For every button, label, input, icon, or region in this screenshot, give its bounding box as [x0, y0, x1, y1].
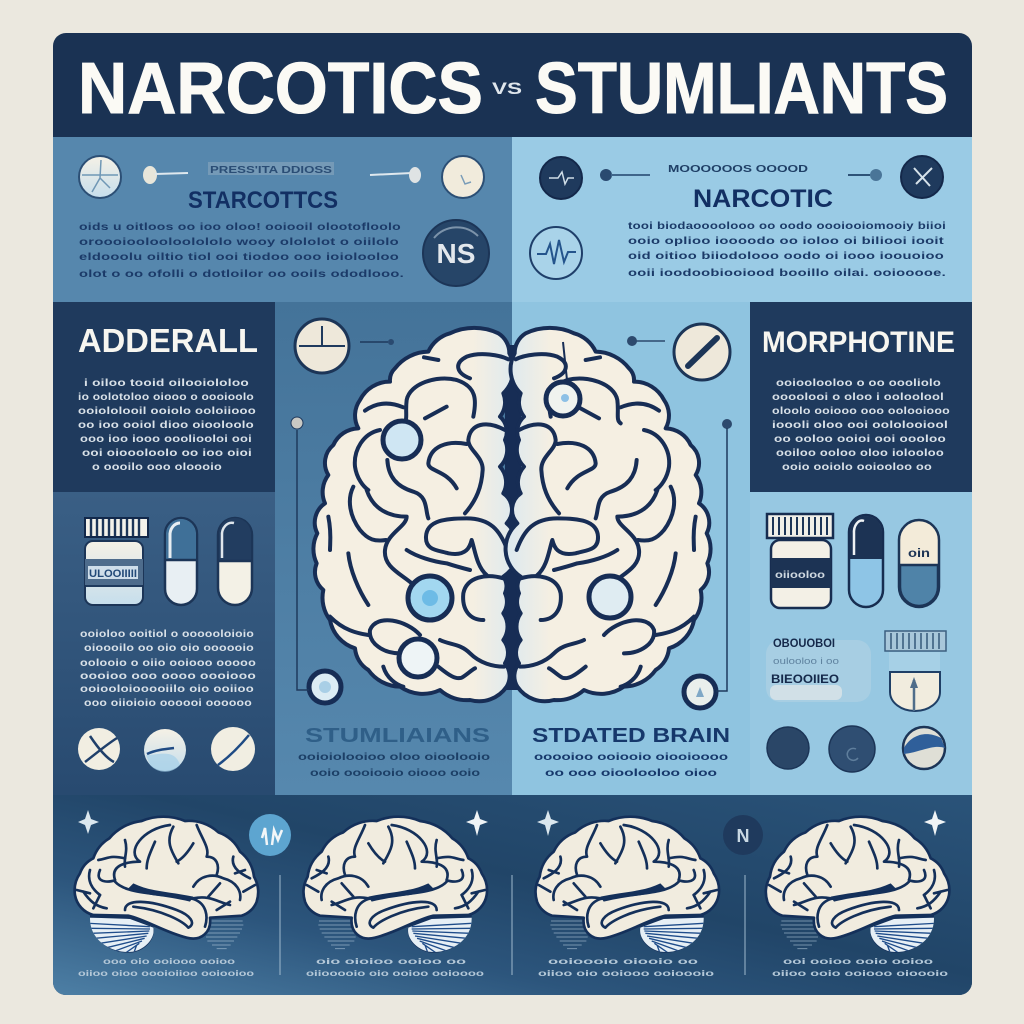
- connector: right: [370, 167, 421, 183]
- icon: dark round tablet with swirl: [829, 726, 875, 772]
- captions brain 3: ooioooio oiooio oo: [548, 956, 698, 966]
- captions brain 1: oiioo oioo oooioiioo ooiooioo: [78, 968, 254, 978]
- panel: right upper area: [512, 137, 972, 302]
- panel: right medication column: [766, 514, 946, 772]
- body text: ooioolooloo o oo oooliolo: [776, 377, 941, 389]
- body text: ooioloo ooitiol o oooooloioio: [80, 628, 254, 640]
- star: far left: [78, 810, 99, 834]
- small label: [208, 162, 334, 176]
- captions brain 2: [306, 956, 484, 978]
- brain side view 1: [75, 817, 258, 955]
- marker: upper left: [383, 421, 421, 459]
- icon: left tablet: [79, 156, 121, 198]
- body text: oioooilo oo oio oio oooooio: [84, 642, 254, 654]
- body text: oooolooi o oloo i ooloolool: [772, 391, 944, 403]
- body text: ooiololooil ooiolo ooloiiooo: [78, 405, 256, 417]
- caption: Stumliaians: ooio oooiooio oiooo ooio: [310, 768, 480, 779]
- caption: Stdated brain: ooooioo ooiooio oiooioooo: [534, 752, 728, 763]
- body text: ooiloo ooloo oloo iolooloo: [776, 447, 944, 459]
- icon: pill bottle: [767, 514, 833, 608]
- icon: capsule blue and white: [165, 518, 197, 605]
- left hemisphere: [313, 328, 518, 701]
- icon: dark tablet right: [901, 156, 943, 198]
- body text: ooo oiioioio oooooi oooooo: [84, 697, 252, 709]
- connector: left: [143, 166, 188, 184]
- heading: Narcotic: NARCOTIC: [693, 185, 833, 213]
- badge: blue: [249, 814, 291, 856]
- captions brain 1: ooo oio ooiooo ooioo: [103, 956, 235, 966]
- panel: center left background: [275, 302, 512, 795]
- panel: Adderall: [78, 322, 258, 473]
- pointers around brain: [291, 319, 732, 691]
- body text: oolooio o oiio ooiooo ooooo: [80, 657, 256, 669]
- icon: scored tablet: [211, 727, 255, 771]
- body text: olot o oo ofolli o dotloilor oo ooils ododlooo.: [79, 268, 404, 280]
- faded label block: [766, 636, 871, 702]
- body text: oloolo ooiooo ooo oolooiooo: [772, 405, 950, 417]
- caption: Stumliaians: [298, 725, 490, 779]
- captions brain 4: oiioo ooio ooiooo oioooio: [772, 968, 948, 978]
- icon: second jar: [885, 631, 946, 711]
- star: third: [537, 810, 559, 836]
- faded label block: BIEOOIIEO: [771, 672, 839, 686]
- panel: Starcotics header and text: [79, 156, 489, 286]
- panel: right lower column: [750, 492, 972, 795]
- icon: emblem tablet: [903, 727, 945, 769]
- icon: dark round tablet: [767, 727, 809, 769]
- faded label block: oulooloo i oo: [773, 656, 839, 666]
- badge: navy: [723, 815, 763, 855]
- marker: upper right: [546, 342, 580, 416]
- body text: io oolotoloo oiooo o oooioolo: [78, 391, 254, 403]
- right hemisphere: [506, 328, 711, 701]
- title: STUMLIANTS: [535, 49, 948, 129]
- icon: pill bottle: [85, 518, 148, 605]
- body text: [772, 377, 950, 473]
- panel: Adderall box: [53, 302, 275, 492]
- panel: left upper area: [53, 137, 512, 302]
- marker: outer right: [684, 676, 716, 708]
- body text: eldooolu oiltio tiol ooi tiodoo ooo ioiolooloo: [79, 251, 399, 263]
- body text: oo ooloo ooioi ooi oooloo: [774, 433, 946, 445]
- marker: lower left: [399, 639, 437, 677]
- title: VS: [492, 79, 522, 98]
- body text: oids u oitloos oo ioo oloo! ooiooil olootofloolo: [79, 221, 401, 233]
- marker: mid left: [408, 576, 452, 620]
- body text: i oiloo tooid oilooiololoo: [84, 377, 249, 389]
- captions brain 3: oiioo oio ooiooo ooioooio: [538, 968, 714, 978]
- body text: oooioo ooo oooo oooiooo: [80, 670, 256, 682]
- connector: upper right: [627, 336, 665, 346]
- badge: NS: NS: [437, 238, 475, 269]
- small label: PRESS'ITA DDIOSS: [210, 165, 332, 176]
- icon: capsule navy and blue: [849, 515, 883, 607]
- connector: left rail: [291, 417, 309, 690]
- panel: Morphotine box: [750, 302, 972, 492]
- body text: ooii ioodoobiooiood booillo oilai. ooiooooe.: [628, 267, 946, 279]
- body text: [79, 221, 404, 280]
- body text: ooio oplioo ioooodo oo ioloo oi biliooi iooit: [628, 235, 944, 247]
- icon: capsule cream and steel blue: oin: [908, 546, 930, 560]
- panel: Morphotine: [762, 326, 955, 473]
- body text: o oooilo ooo oloooio: [92, 461, 222, 473]
- title: [78, 49, 948, 129]
- captions brain 4: ooi ooioo ooio ooioo: [783, 956, 933, 966]
- faded label block: OBOUOBOI: [773, 636, 835, 650]
- connector: right: [848, 169, 882, 181]
- heading: Starcotics: STARCOTTCS: [188, 187, 338, 214]
- divider: [279, 875, 281, 975]
- icon: capsule navy and cream: [218, 518, 252, 605]
- badge: navy: N: [736, 826, 750, 846]
- star: fourth: [924, 810, 946, 836]
- caption: Stdated brain: [532, 725, 730, 779]
- caption: Stumliaians: STUMLIAIANS: [305, 725, 490, 747]
- body text: oroooioolooloolololo wooy olololot o oiilolo: [79, 236, 399, 248]
- captions brain 2: oio oioioo ooioo oo: [316, 956, 466, 966]
- brain diagram: [309, 328, 716, 708]
- captions brain 1: [78, 956, 254, 978]
- body text: oo ioo ooiol dioo oiooloolo: [78, 419, 254, 431]
- heading: Morphotine: MORPHOTINE: [762, 326, 955, 359]
- icon: tablet with swoosh: [144, 729, 186, 772]
- body text: [628, 220, 946, 279]
- panel: brain comparison strip: [75, 810, 949, 978]
- small label: MOOOOOOS OOOOD: [668, 163, 809, 175]
- brain side view 3: [536, 817, 719, 955]
- caption: Stdated brain: STDATED BRAIN: [532, 725, 730, 747]
- captions brain 4: [772, 956, 948, 978]
- marker: outer left: [309, 671, 341, 703]
- connector: upper left: [360, 339, 394, 345]
- caption: Stdated brain: oo ooo oioolooloo oioo: [545, 768, 717, 779]
- star: second: [466, 810, 488, 836]
- marker: mid right: [589, 576, 631, 618]
- icon: right tablet: [442, 156, 484, 198]
- body text: ooio ooiolo ooiooloo oo: [782, 461, 932, 473]
- body text: ooi oioooloolo oo ioo oioi: [82, 447, 252, 459]
- panel: left lower column: [53, 492, 275, 795]
- body text: ioooli oloo ooi oololooiool: [772, 419, 948, 431]
- icon: tablet with X: [78, 728, 120, 770]
- badge: NS: [423, 220, 489, 286]
- icon: pill bottle: oiiooloo: [775, 570, 825, 581]
- icon: pill bottle: ULOOIIIII: [89, 568, 137, 580]
- connector: left: [600, 169, 650, 181]
- heading: Adderall: ADDERALL: [78, 322, 258, 359]
- body text: ooo ioo iooo oooliooloi ooi: [80, 433, 252, 445]
- divider: [511, 875, 513, 975]
- divider: [744, 875, 746, 975]
- body text: tooi biodaoooolooo oo oodo oooiooiomooiy biioi: [628, 220, 946, 232]
- panel: Narcotic header and text: [530, 156, 946, 279]
- panel: left medication column: [78, 518, 256, 772]
- title: NARCOTICS: [78, 49, 483, 129]
- panel: center right background: [512, 302, 750, 795]
- caption: Stumliaians: ooioiolooioo oloo oioolooio: [298, 752, 490, 763]
- icon: dark tablet left: [540, 157, 582, 199]
- body text: [80, 628, 256, 709]
- captions brain 2: oiiooooio oio ooioo ooioooo: [306, 968, 484, 978]
- connector: right rail: [716, 419, 732, 691]
- icon: wave circle: [530, 227, 582, 279]
- body text: oid oitioo biiodolooo oodo oi iooo ioouoioo: [628, 250, 944, 262]
- body text: [78, 377, 256, 473]
- body text: ooiooloiooooiilo oio ooiioo: [80, 683, 254, 695]
- icon: tablet upper right: [674, 324, 730, 380]
- brain side view 2: [304, 817, 487, 955]
- captions brain 3: [538, 956, 714, 978]
- icon: capsule cream and steel blue: [899, 520, 939, 607]
- brain side view 4: [766, 817, 949, 955]
- icon: tablet upper left: [295, 319, 349, 373]
- panel: bottom strip: [53, 795, 972, 995]
